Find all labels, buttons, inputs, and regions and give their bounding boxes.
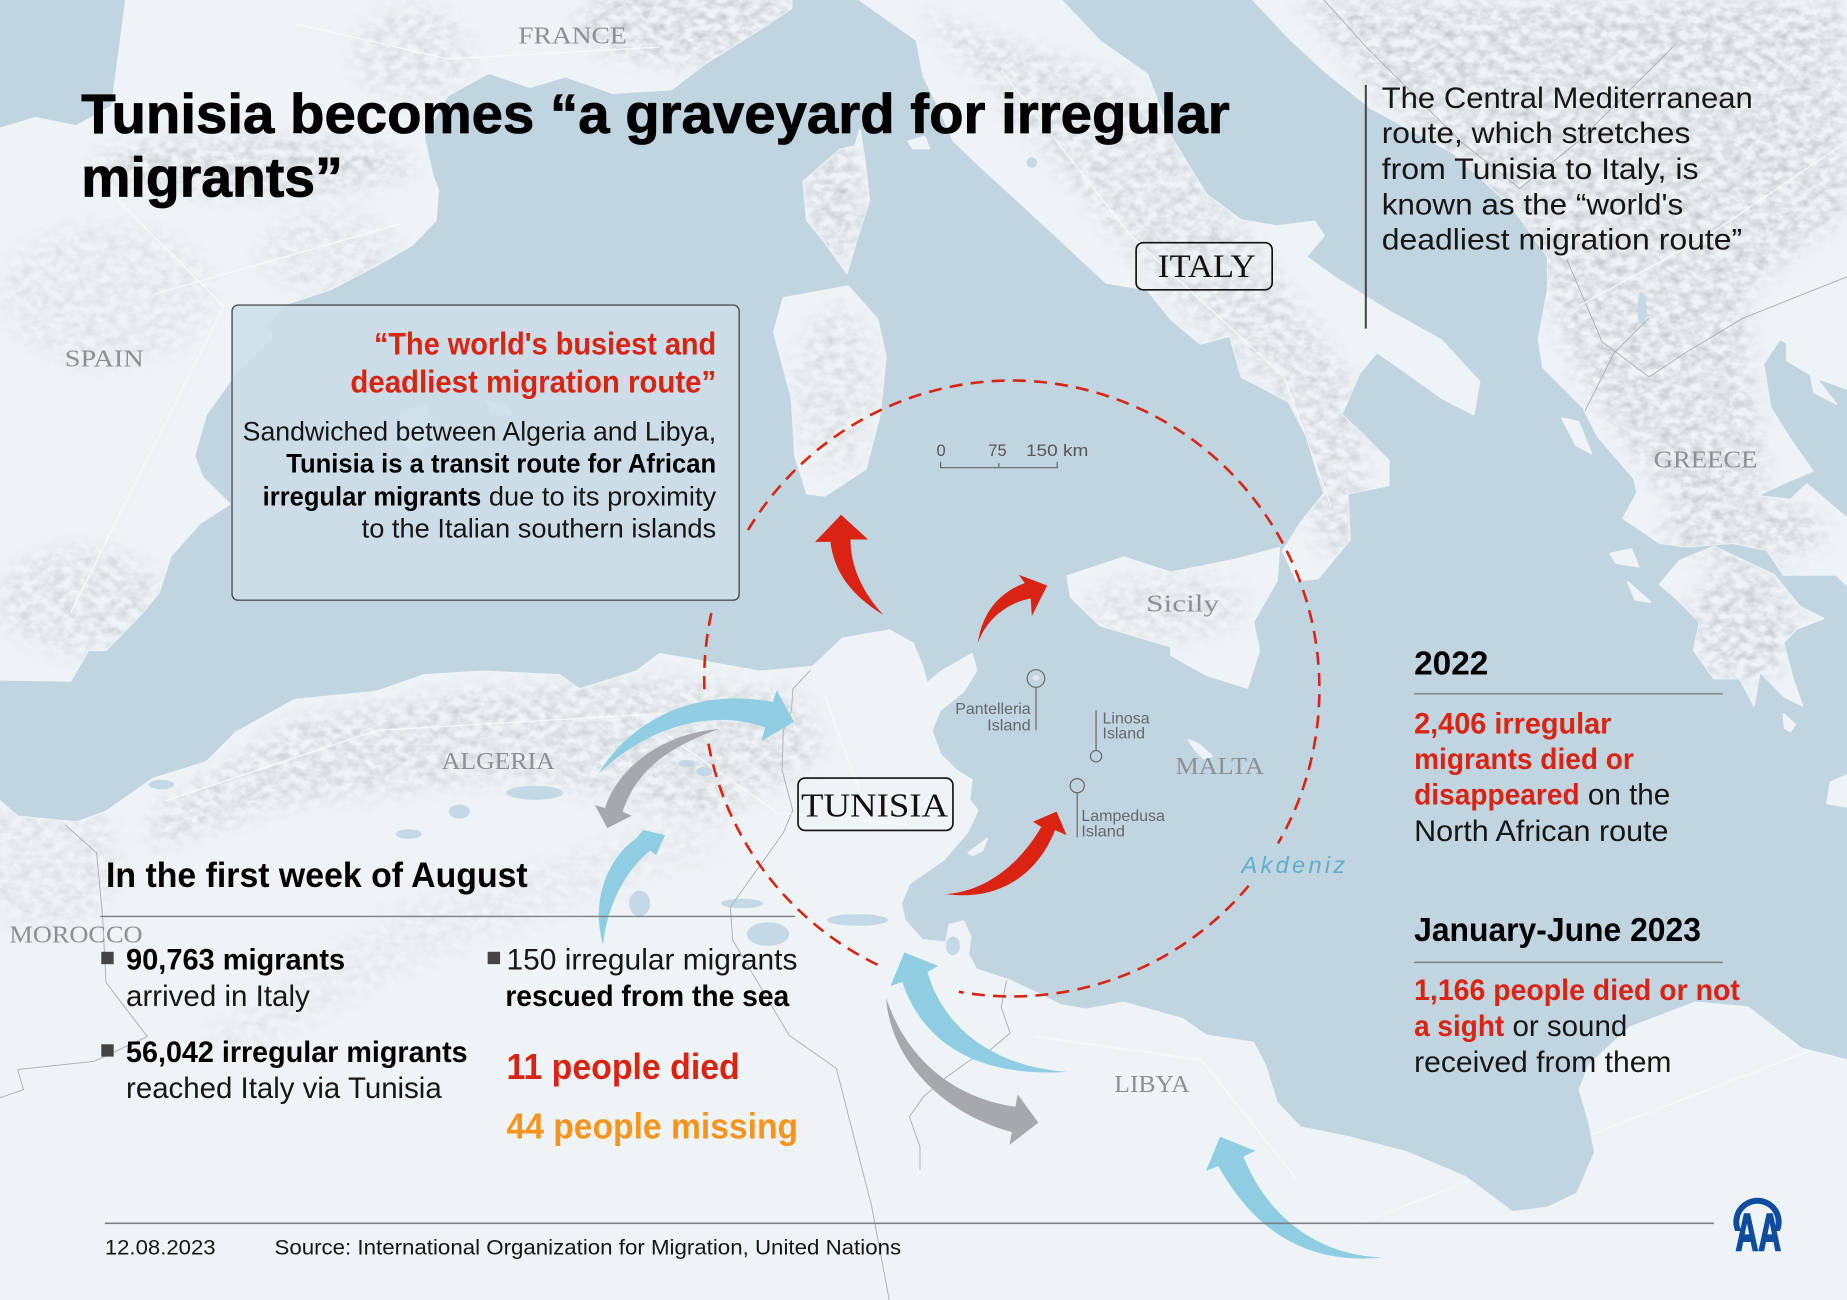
map label: Morocco: MOROCCO xyxy=(9,921,143,948)
scale bar xyxy=(936,442,1088,468)
intro text block with vertical rule xyxy=(1366,82,1753,329)
map label: Libya: LIBYA xyxy=(1114,1071,1190,1098)
arrow: blue Libya into Tunisia xyxy=(891,952,1067,1073)
island marker: Pantelleria: Island xyxy=(987,717,1031,734)
panel: January-June 2023 figures: or sound xyxy=(1512,1010,1627,1043)
panel: 2022 figures: 2,406 irregular xyxy=(1414,707,1612,740)
panel: 2022 figures: on the xyxy=(1588,779,1670,812)
stat: 56,042 irregular migrants: reached Italy via Tunisia xyxy=(126,1072,442,1105)
stat: 44 people missing: 44 people missing xyxy=(507,1105,798,1146)
map label: Akdeniz sea: Akdeniz xyxy=(1240,852,1345,878)
arrow: red toward Sardinia xyxy=(815,515,883,615)
stat: 150 rescued xyxy=(488,943,797,1013)
scale bar: 150 km xyxy=(1026,442,1088,460)
stat: 90,763 migrants xyxy=(101,943,345,1013)
footer: rule, date and source: Source: International Organization for Migration, United Nations xyxy=(274,1237,901,1260)
panel: 2022 figures: North African route xyxy=(1414,815,1669,848)
panel: January-June 2023 figures xyxy=(1414,911,1740,1079)
scale bar: 75 xyxy=(988,442,1007,460)
title: Tunisia becomes “a graveyard for irregular xyxy=(81,83,1230,145)
label box: Italy: ITALY xyxy=(1158,249,1256,285)
island marker: Lampedusa: Lampedusa xyxy=(1081,808,1165,825)
island marker: Pantelleria: Pantelleria xyxy=(955,701,1031,718)
panel: busiest and deadliest route callout: due to its proximity xyxy=(489,480,717,511)
panel: busiest and deadliest route callout: “The world's busiest and xyxy=(374,327,716,362)
map label: Greece: GREECE xyxy=(1654,447,1757,474)
panel: busiest and deadliest route callout: Sandwiched between Algeria and Libya, xyxy=(243,416,716,447)
panel: busiest and deadliest route callout xyxy=(232,305,739,600)
stat: 56,042 irregular migrants xyxy=(101,1036,468,1105)
panel: 2022 figures: migrants died or xyxy=(1414,743,1634,776)
island marker: Lampedusa: Island xyxy=(1081,823,1125,840)
icon: Anadolu Agency logo xyxy=(1733,1198,1782,1261)
map label: Malta: MALTA xyxy=(1176,753,1264,780)
icon: Anadolu Agency logo: AA xyxy=(1736,1203,1781,1261)
title xyxy=(81,83,1230,209)
panel: 2022 figures: disappeared xyxy=(1414,779,1580,812)
panel: January-June 2023 figures: received from them xyxy=(1414,1046,1671,1079)
footer: rule, date and source: 12.08.2023 xyxy=(105,1237,216,1260)
heading: first week of August: In the first week of August xyxy=(106,856,528,895)
stat: 90,763 migrants: arrived in Italy xyxy=(126,980,310,1013)
panel: January-June 2023 figures: January-June 2023 xyxy=(1414,911,1701,948)
title: migrants” xyxy=(81,147,343,209)
panel: busiest and deadliest route callout: to the Italian southern islands xyxy=(362,513,716,544)
arrow: blue from south Libya xyxy=(1206,1137,1382,1259)
map label: Spain: SPAIN xyxy=(65,345,144,372)
panel: January-June 2023 figures: 1,166 people died or not xyxy=(1414,974,1740,1007)
dashed circle: migration route zone xyxy=(704,380,1319,996)
map label: Sicily: Sicily xyxy=(1146,590,1220,617)
island marker: Linosa: Island xyxy=(1103,726,1145,743)
panel: busiest and deadliest route callout: deadliest migration route” xyxy=(350,364,716,399)
stat: 56,042 irregular migrants: 56,042 irregular migrants xyxy=(126,1036,468,1069)
footer: rule, date and source xyxy=(105,1223,1714,1260)
scale bar: 0 xyxy=(936,442,946,460)
label box: Tunisia: TUNISIA xyxy=(801,787,949,824)
stat: 11 people died: 11 people died xyxy=(507,1046,740,1087)
arrow: blue Algeria into Tunisia xyxy=(598,690,794,774)
map label: France: FRANCE xyxy=(518,23,627,50)
intro text block with vertical rule: deadliest migration route” xyxy=(1382,224,1742,257)
label box: Italy xyxy=(1136,243,1272,290)
panel: 2022 figures: 2022 xyxy=(1414,644,1488,681)
intro text block with vertical rule: The Central Mediterranean xyxy=(1382,82,1753,115)
island marker: Pantelleria xyxy=(955,670,1045,734)
stat: 90,763 migrants: 90,763 migrants xyxy=(126,943,345,976)
island marker: Lampedusa xyxy=(1070,779,1165,840)
arrow: red toward Sicily xyxy=(978,575,1047,643)
label box: Tunisia xyxy=(798,778,953,830)
panel: January-June 2023 figures: a sight xyxy=(1414,1010,1504,1043)
intro text block with vertical rule: known as the “world's xyxy=(1382,188,1683,221)
stat: 150 rescued: rescued from the sea xyxy=(505,980,789,1013)
arrow: gray Tunisia back to Libya xyxy=(886,998,1038,1145)
panel: 2022 figures xyxy=(1414,644,1723,848)
arrow: red toward Lampedusa xyxy=(946,812,1067,895)
island marker: Linosa xyxy=(1090,710,1150,762)
intro text block with vertical rule: from Tunisia to Italy, is xyxy=(1382,153,1699,186)
arrow: blue from south Algeria xyxy=(599,830,665,945)
stat: 150 rescued: 150 irregular migrants xyxy=(507,943,797,976)
intro text block with vertical rule: route, which stretches xyxy=(1382,117,1690,150)
map label: Algeria: ALGERIA xyxy=(442,748,555,775)
panel: busiest and deadliest route callout: Tunisia is a transit route for African xyxy=(286,447,716,478)
panel: busiest and deadliest route callout: irregular migrants xyxy=(263,480,481,511)
island marker: Linosa: Linosa xyxy=(1103,710,1150,727)
arrow: gray Tunisia back to Algeria xyxy=(595,729,719,828)
